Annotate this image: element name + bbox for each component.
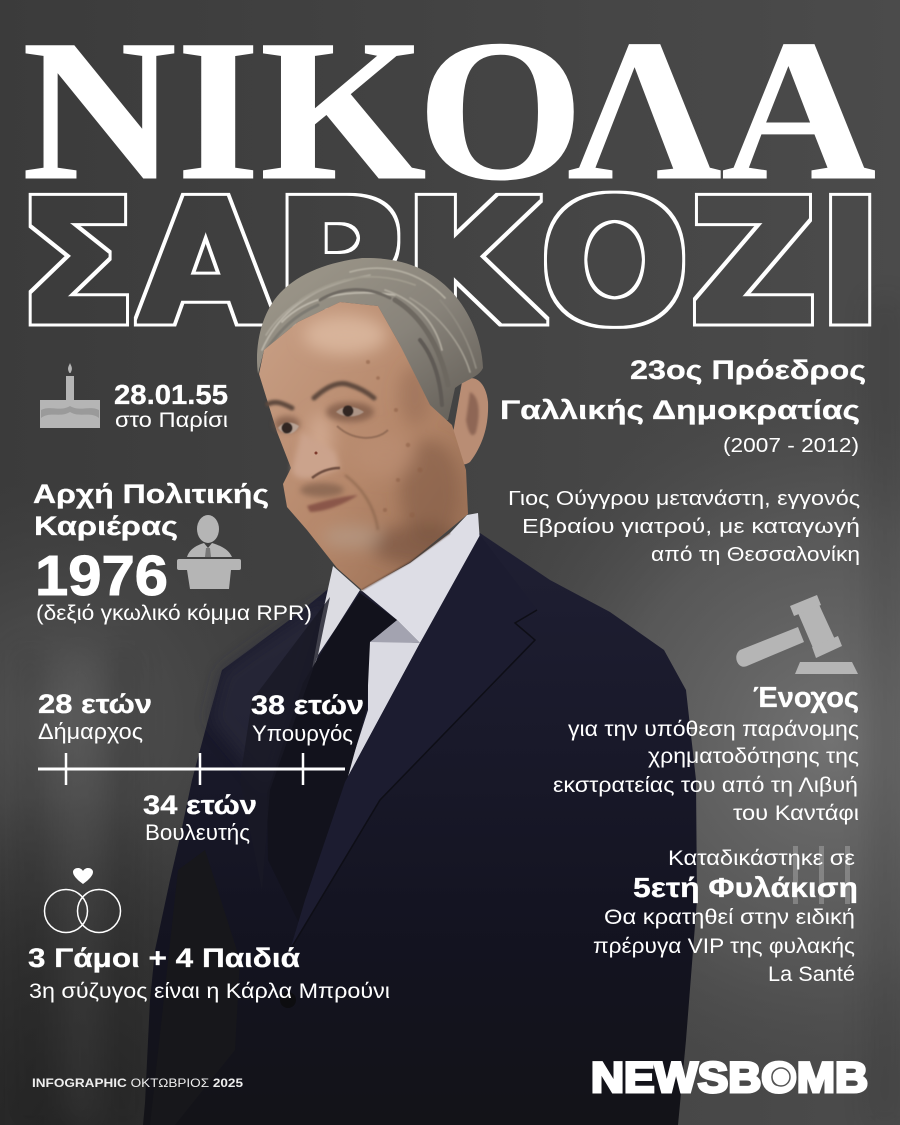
face: [259, 302, 468, 590]
title: first name: ΝΙΚΟΛΑ: [22, 0, 876, 222]
skin spots: [366, 360, 422, 518]
eyebrows: [268, 383, 374, 408]
origin text: Γιος Ούγγρου μετανάστη, εγγονός: [508, 488, 860, 510]
moustache shadow: [300, 483, 344, 497]
ear: [450, 378, 488, 464]
birth place: στο Παρίσι: [115, 409, 228, 432]
detention details: Θα κρατηθεί στην ειδική: [604, 906, 855, 929]
hair: [257, 258, 483, 420]
nasolabial line: [345, 475, 378, 530]
marriages and children: 3 Γάμοι + 4 Παιδιά: [28, 943, 300, 973]
conviction block: [553, 595, 859, 825]
detention details: La Santé: [768, 963, 855, 986]
origin text: Εβραίου γιατρού, με καταγωγή: [522, 516, 860, 538]
icon: birthday cake: [40, 363, 100, 428]
icon: speaker at podium: [177, 515, 241, 589]
presidency block: [500, 355, 866, 457]
left lapel: [240, 597, 330, 890]
detention details: [593, 906, 855, 986]
tie knot and blade: [267, 593, 397, 925]
guilty heading: Ένοχος: [753, 682, 859, 714]
role: 23ος Πρόεδρος: [630, 355, 866, 385]
birth date block: [40, 363, 228, 432]
origin text: [508, 488, 860, 566]
term years: (2007 - 2012): [723, 435, 859, 457]
hair strands: [262, 268, 476, 405]
portrait of Nicolas Sarkozy: [143, 258, 697, 1125]
guilty description: [553, 718, 859, 825]
jacket left chest highlight: [210, 597, 330, 790]
birth date: 28.01.55: [114, 379, 228, 410]
mayor: Δήμαρχος: [38, 719, 143, 744]
logo: Newsbomb: NEWSBOMB: [591, 1054, 868, 1102]
guilty description: του Καντάφι: [733, 802, 859, 825]
sentence: 5ετή Φυλάκιση: [633, 872, 858, 903]
icon: prison bars: [793, 846, 850, 904]
face shading: [303, 315, 470, 565]
career timeline: [38, 689, 364, 845]
jacket button: [280, 992, 296, 1008]
minister: Υπουργός: [252, 721, 353, 746]
guilty description: για την υπόθεση παράνομης: [568, 718, 859, 741]
eyes: [278, 406, 388, 438]
heading: Αρχή Πολιτικής: [33, 479, 269, 509]
age 38: 38 ετών: [251, 690, 364, 720]
party note: (δεξιό γκωλικό κόμμα RPR): [36, 602, 312, 625]
member of parliament: Βουλευτής: [145, 820, 250, 845]
country: Γαλλικής Δημοκρατίας: [500, 395, 860, 425]
heading line two: Καριέρας: [34, 511, 178, 541]
age 28: 28 ετών: [38, 689, 152, 719]
collar shadow: [370, 620, 420, 643]
third wife: 3η σύζυγος είναι η Κάρλα Μπρούνι: [29, 980, 390, 1003]
sentence intro: Καταδικάστηκε σε: [668, 847, 855, 870]
family block: [28, 868, 390, 1003]
left sleeve fold: [150, 850, 240, 1125]
origin text: από τη Θεσσαλονίκη: [651, 544, 860, 566]
title: surname outlined: ΣΑΡΚΟΖΙ: [17, 164, 883, 363]
year: 1976: [35, 544, 168, 608]
shirt collar left: [310, 566, 360, 680]
sentence block: [593, 846, 858, 986]
icon: rings and heart: [44, 868, 120, 932]
political career start block: [33, 479, 312, 625]
mouth: [307, 495, 358, 512]
eye sockets: [274, 402, 374, 432]
icon: gavel: [736, 595, 858, 674]
neck crease: [362, 533, 450, 590]
timeline axis: [38, 753, 345, 785]
guilty description: εκστρατείας του από τη Λιβυή: [553, 774, 858, 797]
jacket: [143, 533, 697, 1125]
age 34: 34 ετών: [143, 790, 257, 820]
shirt front: [345, 640, 420, 782]
right lapel: [290, 535, 537, 950]
nose: [292, 432, 340, 479]
guilty description: χρηματοδότησης της: [648, 745, 859, 768]
footer label: INFOGRAPHIC ΟΚΤΩΒΡΙΟΣ 2025: [32, 1076, 243, 1090]
shirt collar right: [361, 513, 480, 643]
detention details: πρέρυγα VIP της φυλακής: [593, 935, 855, 958]
